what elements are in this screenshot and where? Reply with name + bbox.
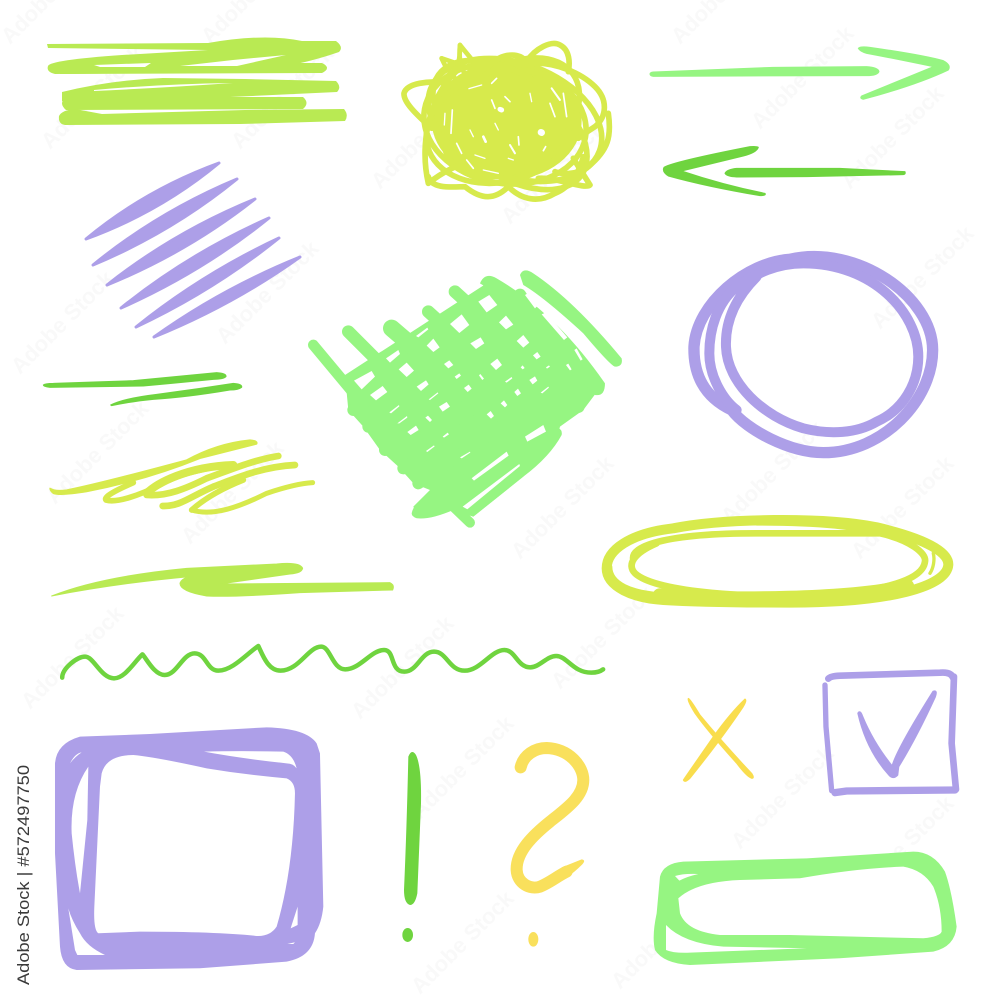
- watermark pattern: Adobe Stock: [726, 740, 839, 854]
- scribble: yellow-green tangled ball: [404, 33, 619, 216]
- watermark pattern: Adobe Stock: [41, 395, 154, 509]
- watermark pattern: Adobe Stock: [546, 580, 659, 694]
- watermark pattern: Adobe Stock: [186, 770, 299, 884]
- square scribble: purple: [55, 727, 323, 970]
- swoosh stroke: lime: [52, 563, 393, 596]
- watermark pattern: Adobe Stock: [716, 415, 829, 529]
- icon: yellow cross: [683, 698, 753, 781]
- oval scribble: yellow-green: [607, 520, 948, 603]
- crosshatch gaps: [354, 292, 583, 509]
- wavy line: dark green: [62, 646, 603, 678]
- watermark pattern: Adobe Stock: [846, 450, 959, 564]
- watermark pattern: Adobe Stock: [506, 450, 619, 564]
- crosshatch scribble: light green: [313, 270, 622, 523]
- watermark pattern: Adobe Stock: [346, 610, 459, 724]
- arrow: light green pointing right: [650, 47, 949, 99]
- underline strokes: dark green pair: [43, 373, 242, 406]
- watermark pattern: Adobe Stock: [406, 710, 519, 824]
- watermark pattern: Adobe Stock: [36, 40, 149, 154]
- stock id caption: Adobe Stock | #572497750: [14, 765, 33, 985]
- watermark pattern: Adobe Stock: [866, 220, 979, 334]
- watermark pattern: Adobe Stock: [226, 40, 339, 154]
- watermark pattern: Adobe Stock: [846, 790, 959, 904]
- icon: purple checkbox with tick: [825, 673, 956, 793]
- circle scribble: purple: [694, 257, 933, 453]
- watermark pattern: Adobe Stock: [836, 80, 949, 194]
- arrow: dark green pointing left: [663, 146, 905, 196]
- watermark pattern: Adobe Stock: [496, 115, 609, 229]
- watermark pattern: Adobe Stock: [746, 20, 859, 134]
- diagonal hatch: purple strokes: [86, 163, 300, 337]
- arrows pair: [650, 47, 949, 196]
- watermark pattern: Adobe Stock: [16, 600, 129, 714]
- watermark pattern: Adobe Stock: [6, 265, 119, 379]
- exclamation mark: [402, 752, 421, 942]
- watermark pattern: Adobe Stock: [211, 235, 324, 349]
- zigzag scribble: yellow-green: [50, 440, 313, 512]
- watermark pattern: Adobe Stock: [366, 80, 479, 194]
- watermark pattern: Adobe Stock: [406, 885, 519, 999]
- watermark pattern: Adobe Stock: [606, 880, 719, 994]
- watermark pattern: Adobe Stock: [176, 435, 289, 549]
- rounded rectangle scribble: light green: [654, 852, 957, 965]
- question mark: [517, 748, 584, 947]
- scribble: lime horizontal block: [47, 37, 347, 125]
